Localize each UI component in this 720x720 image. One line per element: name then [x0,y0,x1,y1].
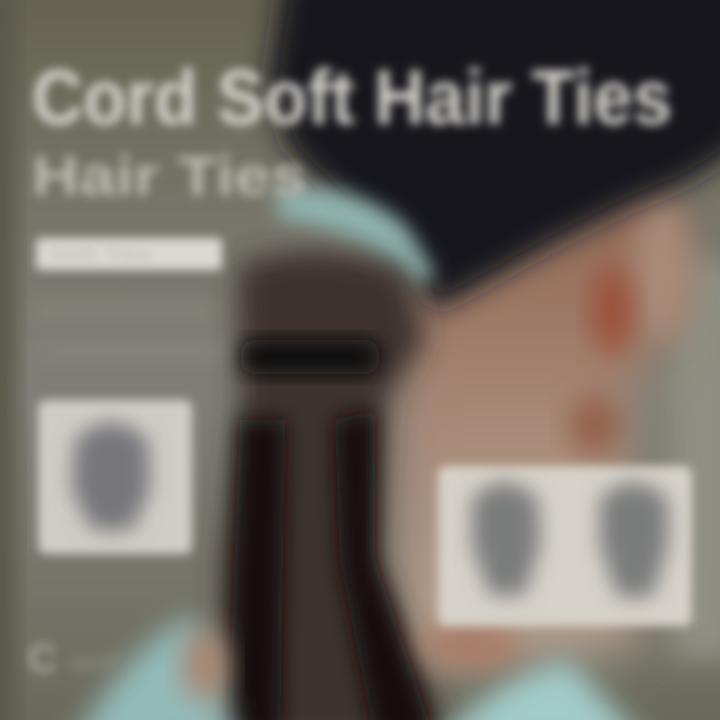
panel: left hair tie card [38,400,192,554]
panel: right hair ties card [438,466,692,626]
footer text: ord [70,646,118,679]
footer text [28,637,118,681]
faint text block [35,305,225,357]
icon: hair tie right [600,482,668,597]
neck and ear [395,190,692,670]
hair scrunchie [275,188,435,285]
icon: hair tie left [472,482,540,595]
subtitle: Hair Ties [32,144,307,207]
icon: hair tie [72,422,150,530]
label bar [36,238,222,270]
ponytail [222,251,450,720]
label bar: Soft Ties [50,241,151,268]
title: Cord Soft Hair Ties [32,53,672,141]
hair [268,0,720,310]
footer text: C [28,637,57,681]
shirt collar [70,615,650,720]
